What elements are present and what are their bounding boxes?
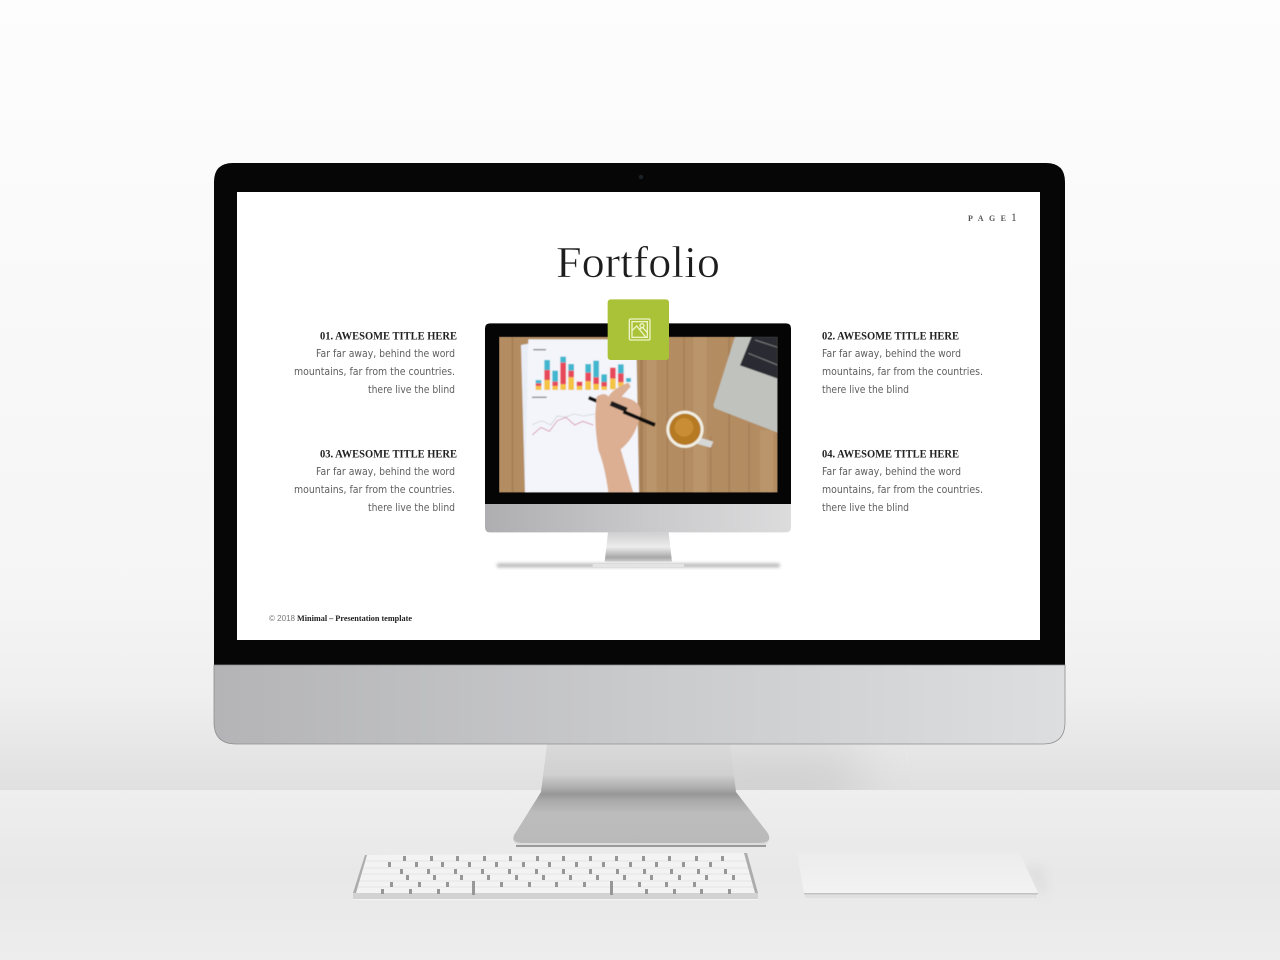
- text block 04: [822, 448, 983, 514]
- paper sheets: [521, 343, 530, 493]
- text block 03: there live the blind: [368, 501, 455, 514]
- text block 02: mountains, far from the countries.: [822, 365, 983, 378]
- coffee cup: [666, 411, 713, 448]
- text block 03: [294, 448, 457, 514]
- monitor bezel: [214, 163, 1065, 665]
- text block 01: [294, 330, 457, 396]
- pen: [589, 398, 655, 425]
- text block 01: mountains, far from the countries.: [294, 365, 455, 378]
- mini monitor: [485, 299, 791, 567]
- text block 02: [822, 330, 983, 396]
- line chart: [532, 414, 595, 435]
- page label: 1: [1011, 212, 1017, 224]
- monitor chin: [214, 665, 1065, 744]
- mini monitor bezel: [485, 323, 791, 504]
- text block 01: Far far away, behind the word: [316, 347, 455, 360]
- text block 02: 02. AWESOME TITLE HERE: [822, 330, 959, 342]
- text block 03: 03. AWESOME TITLE HERE: [320, 448, 457, 460]
- text block 02: Far far away, behind the word: [822, 347, 961, 360]
- stacked bar chart: [536, 357, 631, 390]
- large monitor: [214, 163, 1065, 744]
- text block 03: Far far away, behind the word: [316, 465, 455, 478]
- green badge: [608, 299, 669, 360]
- chart captions: [532, 349, 547, 398]
- text block 01: there live the blind: [368, 383, 455, 396]
- desk photo: [499, 337, 778, 493]
- text block 03: mountains, far from the countries.: [294, 483, 455, 496]
- mini monitor chin: [485, 504, 791, 532]
- stand shadow on wall: [690, 750, 860, 810]
- title: Fortfolio: [556, 238, 720, 287]
- hand: [595, 383, 641, 493]
- keyboard key gaps: [381, 856, 735, 895]
- text block 04: 04. AWESOME TITLE HERE: [822, 448, 959, 460]
- pen grip: [611, 403, 627, 410]
- desk surface: [0, 790, 1280, 960]
- footer: © 2018: [269, 614, 296, 623]
- trackpad: [797, 853, 1048, 898]
- text block 04: there live the blind: [822, 501, 909, 514]
- mini monitor stand: [605, 532, 672, 562]
- page label: PAGE: [968, 214, 1006, 223]
- laptop: [714, 337, 778, 433]
- text block 02: there live the blind: [822, 383, 909, 396]
- monitor stand: [513, 744, 769, 847]
- page label: [968, 212, 1017, 224]
- mini monitor shadow: [497, 563, 780, 567]
- text block 04: mountains, far from the countries.: [822, 483, 983, 496]
- footer: Minimal – Presentation template: [297, 613, 412, 623]
- text block 01: 01. AWESOME TITLE HERE: [320, 330, 457, 342]
- camera: [639, 175, 643, 179]
- icon: picture: [629, 319, 650, 340]
- keyboard: [353, 853, 758, 900]
- text block 04: Far far away, behind the word: [822, 465, 961, 478]
- slide screen: [237, 192, 1040, 640]
